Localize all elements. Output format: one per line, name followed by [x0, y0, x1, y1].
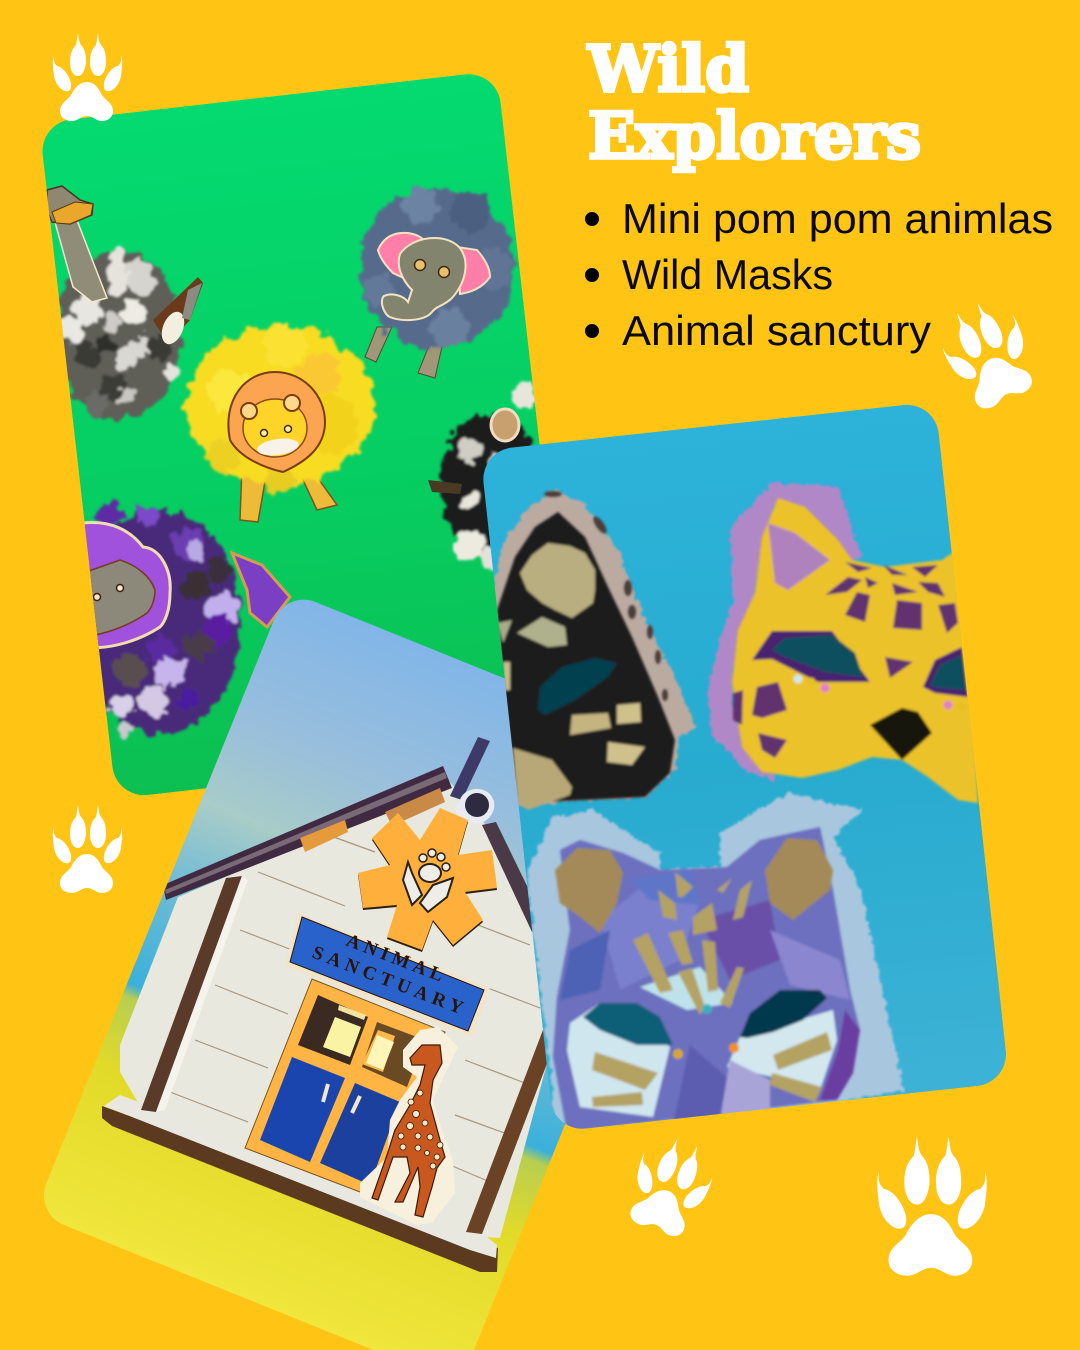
- purple tissue paper mask: [527, 793, 903, 1133]
- lion pom pom: [186, 323, 374, 522]
- activity list: Wild Masks: [622, 251, 833, 298]
- gorilla pom pom: [78, 503, 290, 738]
- title: Wild: [587, 32, 749, 107]
- base board: [102, 1106, 498, 1272]
- house wall: [120, 782, 552, 1238]
- elephant pom pom: [358, 187, 514, 378]
- zebra pom pom: [428, 383, 540, 568]
- wall plank lines: [170, 832, 540, 1182]
- icon: large paw bottom right: [877, 1137, 987, 1276]
- activity list: Mini pom pom animlas: [622, 195, 1053, 242]
- roof and posts: [163, 766, 452, 900]
- icon: paw top left: [53, 33, 122, 121]
- title: [587, 32, 921, 174]
- icon: paw bottom centre, tilted: [620, 1130, 721, 1243]
- windows: [298, 995, 368, 1065]
- door frame: [245, 979, 445, 1198]
- icon: paw left middle: [53, 805, 122, 893]
- hanger ring: [455, 789, 494, 825]
- house model: [102, 737, 556, 1272]
- icon: paw near list, tilted: [931, 292, 1045, 416]
- title: Explorers: [588, 99, 921, 174]
- sanctuary sign: SANCTUARY: [309, 942, 466, 1019]
- giraffe cutout: [360, 1027, 458, 1225]
- sanctuary sign: [285, 913, 490, 1037]
- black and gold mask: [492, 490, 695, 810]
- panel: animal sanctuary house photo: [44, 600, 566, 1350]
- panel: wild masks photo: [480, 402, 1009, 1133]
- ostrich pom pom: [47, 186, 203, 419]
- yellow leopard mask: [708, 483, 978, 803]
- activity list: Animal sanctury: [622, 307, 931, 354]
- panel: mini pom pom animals photo: [39, 71, 574, 799]
- blue doors: [260, 1057, 345, 1162]
- orange medical star with paw: [358, 808, 497, 952]
- activity list: [585, 195, 1053, 354]
- sanctuary sign: ANIMAL: [343, 930, 446, 986]
